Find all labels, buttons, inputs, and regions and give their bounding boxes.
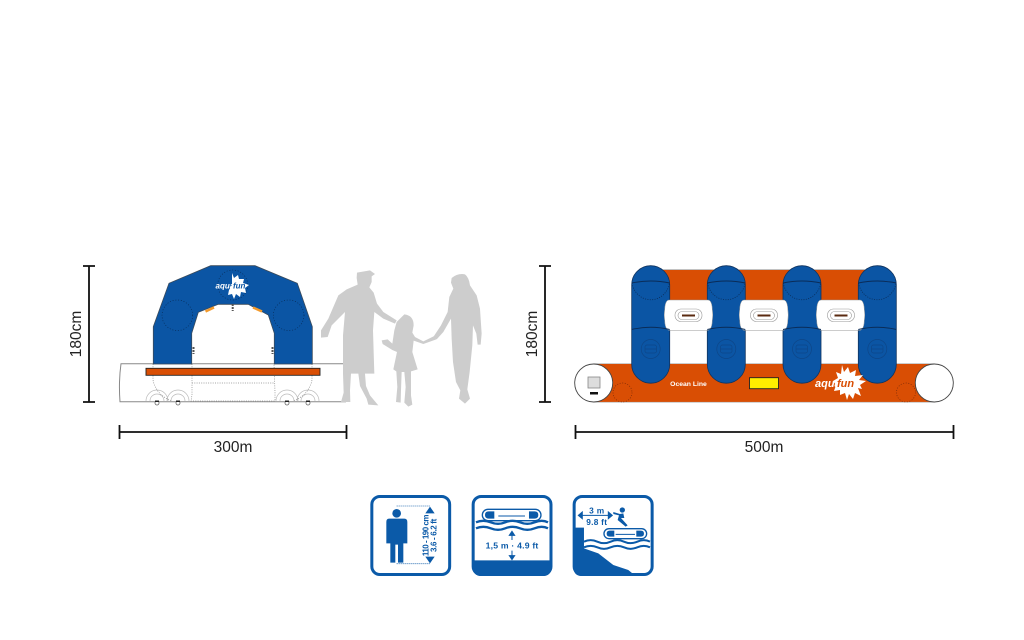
left width dimension	[120, 425, 346, 456]
icon: jump distance	[574, 496, 652, 576]
man	[321, 270, 397, 405]
icon: user height	[372, 496, 450, 574]
upper orange tube	[645, 270, 885, 301]
icon: user height: 110 - 190 cm	[422, 514, 431, 556]
front view: inflatable arch on tube	[119, 266, 346, 405]
arch logo: aqua	[216, 282, 235, 290]
woman	[433, 274, 482, 404]
aquafun logo: aqua	[815, 378, 841, 390]
icon: jump distance: 3 m	[589, 506, 604, 516]
pillar seams and valves	[632, 281, 896, 358]
dotted valves on lower tube	[613, 383, 916, 402]
arch logo: fun	[233, 282, 246, 290]
right end cap	[915, 364, 953, 402]
hatch centres	[682, 314, 848, 316]
orange deck bar	[146, 368, 320, 375]
lower tube	[119, 364, 346, 405]
icon: user height: 3.6 - 6.2 ft	[429, 518, 438, 552]
left end cap	[575, 364, 613, 402]
left height dimension	[68, 266, 95, 402]
right width dimension: 500m	[745, 439, 783, 456]
icon: jump distance: 9.8 ft	[586, 517, 607, 527]
lower orange tube	[594, 364, 934, 402]
left width dimension: 300m	[214, 439, 252, 456]
arch valve circles	[162, 270, 304, 331]
icon: water depth: 1,5 m · 4.9 ft	[486, 541, 538, 551]
aquafun logo	[815, 365, 866, 400]
icon: water depth	[473, 496, 551, 576]
blue pillars	[632, 266, 896, 383]
left height dimension: 180cm	[68, 311, 85, 357]
Ocean Line text: Ocean Line	[670, 381, 707, 388]
blue arch	[153, 266, 312, 364]
white connector panels	[664, 300, 865, 330]
girl	[382, 314, 436, 407]
orange arch pads	[206, 308, 262, 312]
right width dimension	[576, 425, 954, 456]
connector panel hatches	[675, 309, 854, 322]
people silhouettes	[321, 270, 482, 407]
aquafun logo: fun	[837, 378, 854, 390]
right height dimension: 180cm	[524, 311, 541, 357]
side view: Ocean Line inflatable	[575, 266, 953, 402]
right height dimension	[524, 266, 551, 402]
arch logo	[216, 273, 249, 299]
arch clips	[194, 304, 272, 354]
yellow label	[750, 378, 778, 389]
